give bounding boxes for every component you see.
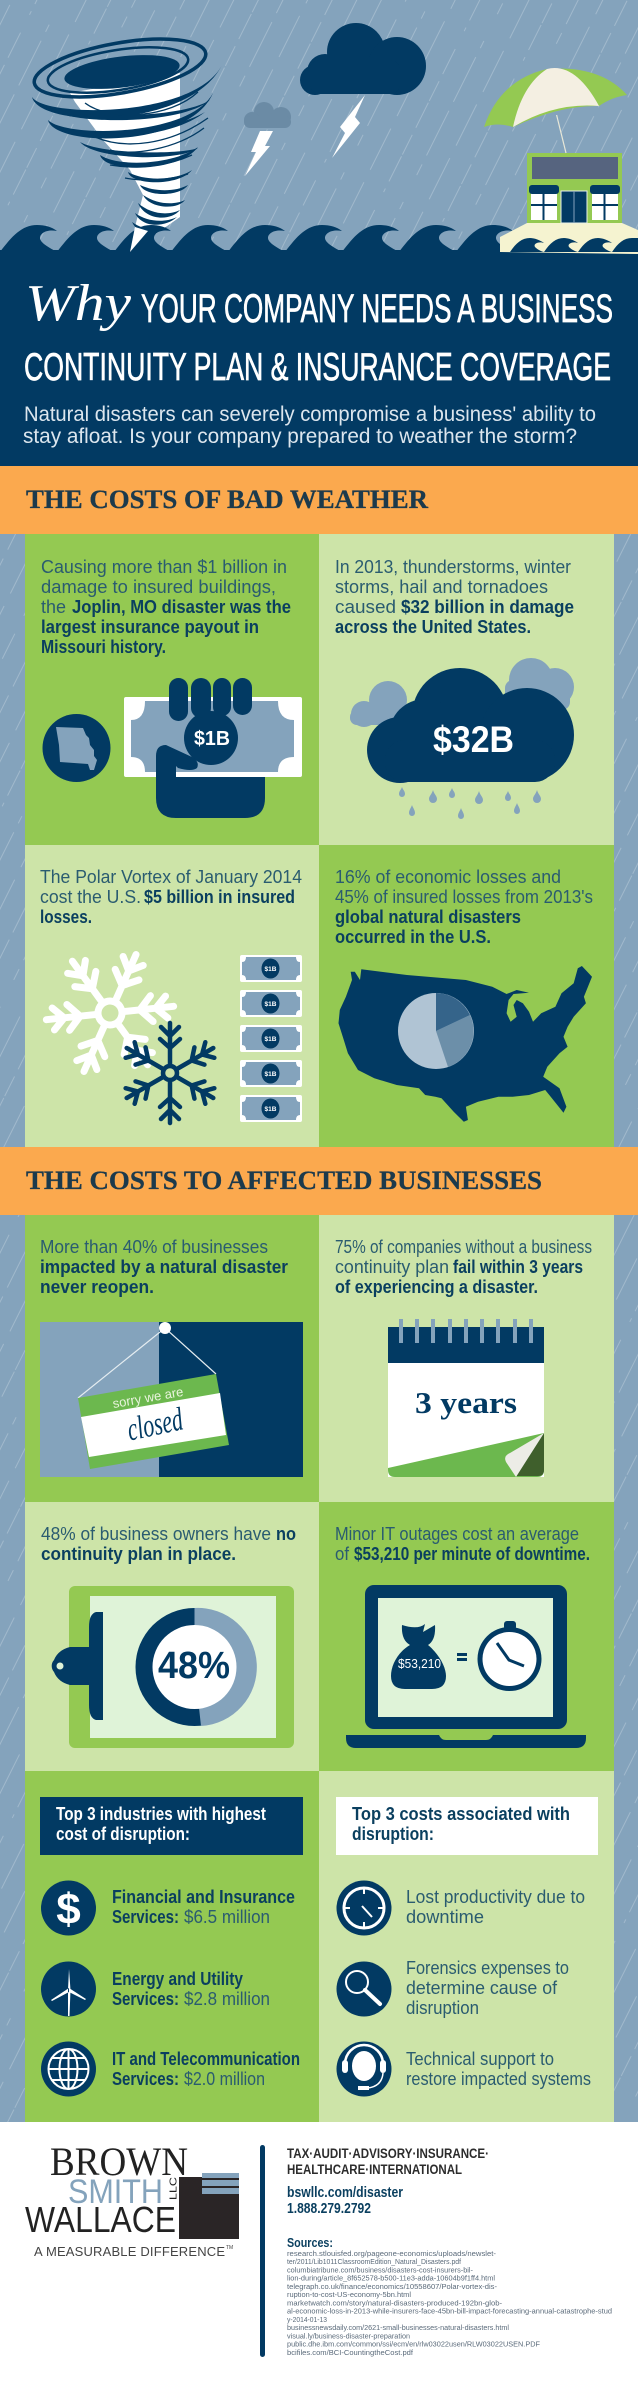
icon: closed sign on door: sorry we are [111, 1384, 184, 1411]
panel: cost per minute of downtime [319, 1502, 614, 1771]
panel: Joplin disaster [25, 534, 319, 845]
financial and insurance text: Services: [112, 1906, 179, 1927]
energy and utility text: Services: [112, 1988, 179, 2009]
sources: columbiatribune.com/business/disasters-cost-insurers-bil- [287, 2268, 474, 2274]
financial and insurance text [112, 1886, 295, 1927]
panel: companies fail within three years: fail within 3 years [453, 1256, 583, 1277]
panel: Joplin disaster: Joplin, MO disaster was the [72, 596, 291, 617]
icon: wind turbine [41, 1962, 96, 2016]
panel: 32 billion damage: storms, hail and tornadoes [335, 576, 548, 597]
intro text [23, 402, 596, 448]
sources: visual.ly/business-disaster-preparation [287, 2334, 410, 2340]
panel: businesses never reopen: More than 40% of businesses [40, 1236, 268, 1257]
IT and telecommunication text: Services: [112, 2068, 179, 2089]
logo: Brown Smith Wallace: A MEASURABLE DIFFERENCE [34, 2244, 225, 2259]
contact block: TAX·AUDIT·ADVISORY·INSURANCE· [287, 2146, 489, 2161]
contact block: 1.888.279.2792 [287, 2200, 371, 2217]
icon: small cloud with lightning [244, 102, 291, 176]
icon: navy snowflake [122, 1023, 218, 1123]
heading: top 3 costs: Top 3 costs associated with [352, 1804, 570, 1824]
logo: Brown Smith Wallace: LLC [168, 2177, 180, 2200]
contact block: HEALTHCARE·INTERNATIONAL [287, 2162, 462, 2177]
panel: global losses in the US [319, 845, 614, 1147]
icon: stack of five bills [240, 955, 302, 1122]
financial and insurance text: Financial and Insurance [112, 1886, 295, 1907]
icon: white snowflake [27, 929, 193, 1097]
title: Why [25, 275, 132, 332]
panel: Joplin disaster: damage to insured buildings, [41, 576, 276, 597]
divider bar [260, 2145, 265, 2357]
panel: polar vortex: The Polar Vortex of January 2014 [40, 866, 302, 887]
panel: businesses never reopen: never reopen. [40, 1276, 154, 1297]
section banner: the costs to affected businesses [0, 1147, 638, 1215]
panel: cost per minute of downtime: $53,210 per minute of downtime. [354, 1543, 590, 1564]
sources: lion-during/article_8f652578-b500-11e3-adda-10604b9f1ff4.html [287, 2276, 495, 2283]
icon: stack of five bills: $1B [265, 966, 277, 973]
heading: top 3 industries: cost of disruption: [56, 1824, 190, 1844]
panel: 32 billion damage: In 2013, thunderstorms, winter [335, 556, 571, 577]
icon: hand holding one billion dollar bill [124, 678, 302, 818]
icon: closed sign on door [40, 1322, 303, 1477]
heading: top 3 costs: disruption: [352, 1824, 434, 1844]
icon: headset [336, 2042, 392, 2096]
forensics expenses text: disruption [406, 1997, 479, 2018]
logo: Brown Smith Wallace: WALLACE [25, 2199, 176, 2240]
heading: top 3 costs [336, 1797, 598, 1855]
panel: polar vortex: cost the U.S. [40, 886, 141, 907]
footer background [0, 2122, 638, 2381]
sources: al-economic-loss-in-2013-while-insurers-face-45bn-bill-impact-forecasting-annual-catastrophe-stud [287, 2309, 612, 2316]
panel: no continuity plan: continuity plan in place. [41, 1543, 236, 1564]
logo: Brown Smith Wallace: SMITH [68, 2173, 163, 2211]
logo: Brown Smith Wallace: BROWN [50, 2139, 188, 2184]
panel: Joplin disaster: largest insurance payout in [41, 616, 259, 637]
icon: clipboard with 48 percent donut: 48% [158, 1645, 230, 1687]
icon: large storm cloud with lightning [300, 23, 426, 158]
heading: top 3 industries: Top 3 industries with highest [56, 1804, 266, 1824]
panel: global losses in the US: 45% of insured losses from 2013's [335, 886, 593, 907]
sources: ruption-to-cost-US-economy-5bn.html [287, 2292, 411, 2299]
icon: calendar [388, 1319, 544, 1477]
icon: stack of five bills: $1B [265, 1106, 277, 1113]
financial and insurance text: $6.5 million [184, 1906, 270, 1927]
forensics expenses text: determine cause of [406, 1977, 558, 1998]
panel: businesses never reopen: impacted by a natural disaster [40, 1256, 288, 1277]
icon: hand holding one billion dollar bill: $1B [194, 728, 230, 750]
panel: businesses never reopen [25, 1215, 319, 1502]
panel: Joplin disaster: the [41, 596, 66, 617]
sources: research.stlouisfed.org/pageone-economics/uploads/newslet- [287, 2251, 497, 2258]
panel: no continuity plan: 48% of business owners have [41, 1523, 271, 1544]
panel: polar vortex [25, 845, 319, 1147]
energy and utility text [112, 1968, 270, 2009]
panel: companies fail within three years: of experiencing a disaster. [335, 1276, 538, 1297]
sources: Sources: [287, 2235, 333, 2250]
panel: polar vortex: $5 billion in insured [144, 886, 295, 907]
icon: rain clouds with 32B: $32B [433, 719, 514, 760]
contact block: bswllc.com/disaster [287, 2184, 403, 2201]
panel: 32 billion damage: across the United States. [335, 616, 531, 637]
sources: ter/2011/Lib1011ClassroomEdition_Natural_Disasters.pdf [287, 2259, 461, 2266]
panel: top 3 industries [25, 1771, 319, 2122]
panel: companies fail within three years: 75% of companies without a business [335, 1236, 592, 1257]
section banner: the costs to affected businesses: THE COSTS TO AFFECTED BUSINESSES [26, 1166, 542, 1195]
lost productivity text: Lost productivity due to [406, 1886, 585, 1907]
icon: rain clouds with 32B [350, 658, 574, 819]
panel: Joplin disaster: Missouri history. [41, 636, 166, 657]
sources: public.dhe.ibm.com/common/ssi/ecm/en/rlw03022usen/RLW03022USEN.PDF [287, 2342, 540, 2349]
panel: polar vortex: losses. [40, 906, 92, 927]
panel: global losses in the US: global natural disasters [335, 906, 521, 927]
icon: Missouri state [42, 714, 110, 782]
logo: Brown Smith Wallace [25, 2139, 239, 2259]
panel: 32 billion damage: caused [335, 596, 396, 617]
icon: closed sign on door: closed [124, 1402, 186, 1448]
technical support text [406, 2048, 591, 2089]
icon: calendar: 3 years [415, 1385, 517, 1420]
icon: tornado tip [130, 227, 148, 252]
icon: tornado [30, 28, 222, 252]
icon: globe [41, 2042, 96, 2096]
icon: laptop with money bag and stopwatch: $53,210 [398, 1657, 441, 1671]
panel: no continuity plan [25, 1502, 319, 1771]
panel: no continuity plan: no [276, 1523, 296, 1544]
icon: laptop with money bag and stopwatch [346, 1585, 586, 1748]
icon: stack of five bills: $1B [265, 1001, 277, 1008]
icon: stack of five bills: $1B [265, 1071, 277, 1078]
title [24, 275, 613, 389]
energy and utility text: $2.8 million [184, 1988, 270, 2009]
panel: cost per minute of downtime: Minor IT outages cost an average [335, 1523, 579, 1544]
lost productivity text [406, 1886, 585, 1927]
technical support text: restore impacted systems [406, 2068, 591, 2089]
forensics expenses text: Forensics expenses to [406, 1957, 569, 1978]
intro text: Natural disasters can severely compromise a business' ability to [24, 402, 596, 426]
heading: top 3 industries [40, 1797, 303, 1855]
panel: top 3 costs [319, 1771, 614, 2122]
panel: 32 billion damage [319, 534, 614, 845]
lost productivity text: downtime [406, 1906, 484, 1927]
panel: Joplin disaster: Causing more than $1 billion in [41, 556, 287, 577]
icon: dollar sign [41, 1880, 96, 1936]
icon: stack of five bills: $1B [265, 1036, 277, 1043]
US map [338, 966, 592, 1122]
panel: companies fail within three years: continuity plan [335, 1256, 449, 1277]
technical support text: Technical support to [406, 2048, 554, 2069]
panel: global losses in the US: occurred in the U.S. [335, 926, 491, 947]
section banner: the costs of bad weather: THE COSTS OF BAD WEATHER [26, 485, 428, 514]
icon: magnifying glass [336, 1962, 392, 2016]
sources: marketwatch.com/story/natural-disasters-produced-192bn-glob- [287, 2300, 503, 2308]
panel: cost per minute of downtime: of [335, 1543, 350, 1564]
icon: dollar sign: $ [56, 1885, 81, 1934]
icon: shop on island under umbrella [484, 68, 638, 254]
sources: y-2014-01-13 [287, 2317, 327, 2324]
contact block [287, 2146, 489, 2217]
panel: 32 billion damage: $32 billion in damage [401, 596, 574, 617]
intro text: stay afloat. Is your company prepared to weather the storm? [23, 424, 577, 448]
sources: telegraph.co.uk/finance/economics/10558607/Polar-vortex-dis- [287, 2284, 498, 2291]
IT and telecommunication text [112, 2048, 300, 2089]
icon: clipboard with 48 percent donut [52, 1586, 294, 1748]
icon: clock [336, 1880, 392, 1936]
sources: businessnewsdaily.com/2621-small-businesses-natural-disasters.html [287, 2325, 509, 2332]
waves and title background [0, 225, 638, 466]
panel: companies fail within three years [319, 1215, 614, 1502]
logo: Brown Smith Wallace: TM [226, 2245, 233, 2251]
pie chart [398, 993, 474, 1069]
IT and telecommunication text: $2.0 million [184, 2068, 265, 2089]
energy and utility text: Energy and Utility [112, 1968, 244, 1989]
IT and telecommunication text: IT and Telecommunication [112, 2048, 300, 2069]
section banner: the costs of bad weather [0, 466, 638, 534]
panel: global losses in the US: 16% of economic losses and [335, 866, 561, 887]
sources: bcifiles.com/BCI-CountingtheCost.pdf [287, 2350, 413, 2357]
sources [287, 2235, 612, 2357]
forensics expenses text [406, 1957, 569, 2018]
